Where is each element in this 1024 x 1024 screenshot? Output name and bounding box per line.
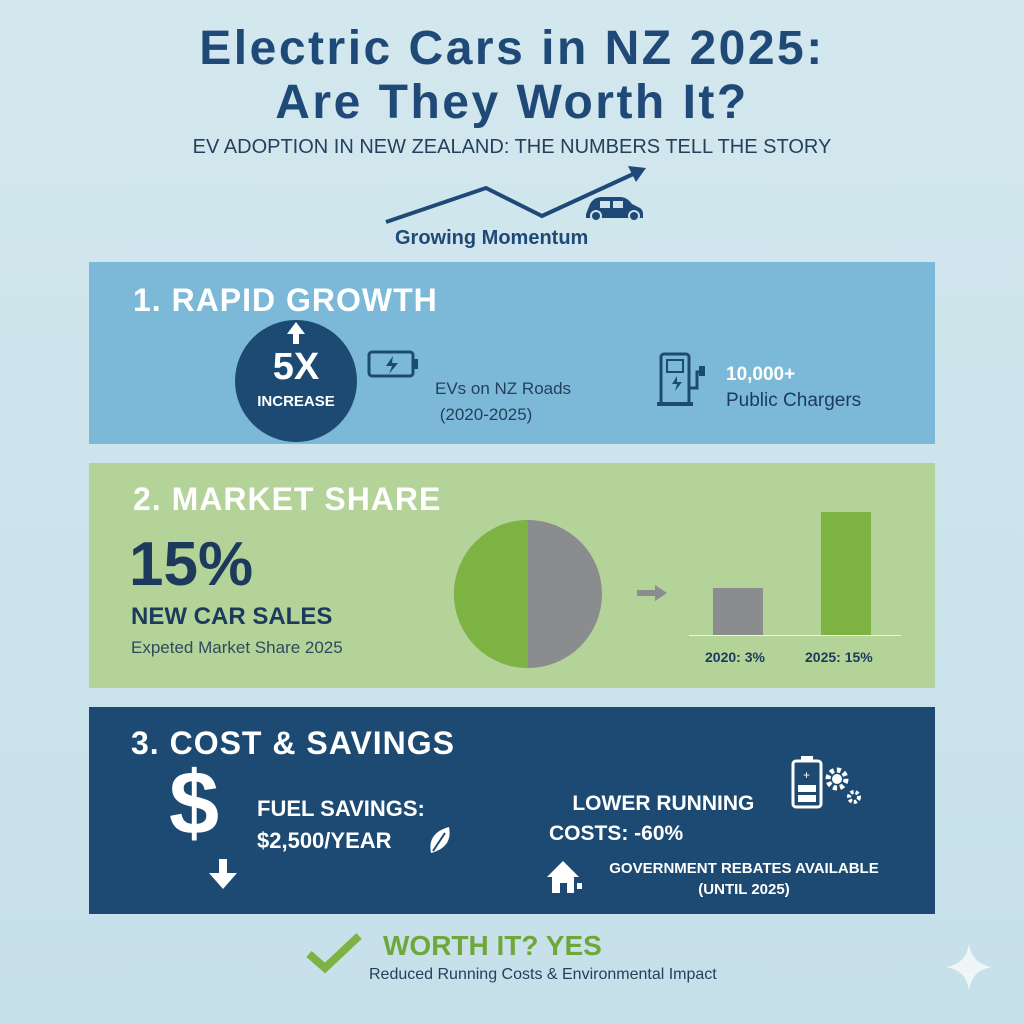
lower running costs text: LOWER RUNNING <box>572 792 754 815</box>
panel: market share <box>89 463 935 688</box>
rebates text: GOVERNMENT REBATES AVAILABLE <box>609 860 879 877</box>
circle 5x <box>235 320 357 442</box>
label new car sales: NEW CAR SALES <box>131 603 332 630</box>
caption: Reduced Running Costs & Environmental Impact <box>369 966 717 983</box>
text: chargers <box>726 364 861 411</box>
rebates text: (UNTIL 2025) <box>698 881 790 898</box>
pie chart <box>454 520 602 668</box>
conclusion: worth it <box>306 930 717 983</box>
fuel savings text: $2,500/YEAR <box>257 828 392 853</box>
text: EVs on roads: EVs on NZ Roads <box>435 379 571 398</box>
circle 5x: INCREASE <box>257 393 335 410</box>
icon: battery <box>368 350 418 378</box>
panel: cost & savings <box>89 707 935 914</box>
text: chargers: Public Chargers <box>726 390 861 411</box>
caption: Expeted Market Share 2025 <box>131 638 343 657</box>
icon: checkmark <box>306 933 362 974</box>
lower running costs text <box>549 792 754 845</box>
icon: charger <box>657 352 705 406</box>
growth chart with car <box>385 166 646 224</box>
arrow <box>637 585 667 601</box>
fuel savings text <box>257 796 425 853</box>
icon: house with plug <box>547 861 582 893</box>
title <box>199 22 825 129</box>
text: EVs on roads <box>435 379 571 424</box>
subtitle: EV ADOPTION IN NEW ZEALAND: THE NUMBERS TELL THE STORY <box>193 136 831 158</box>
icon: leaf <box>430 827 450 853</box>
heading: 3. COST & SAVINGS <box>131 725 455 761</box>
heading: 2. MARKET SHARE <box>133 481 441 517</box>
stat 15%: 15% <box>129 530 253 599</box>
panel: rapid growth <box>89 262 935 444</box>
icon: battery & gears <box>792 756 861 808</box>
lower running costs text: COSTS: -60% <box>549 822 683 845</box>
label: growing momentum: Growing Momentum <box>395 227 588 249</box>
bar chart <box>689 512 901 665</box>
bar chart: 2020: 3% <box>705 649 765 665</box>
bar chart: 2025: 15% <box>805 649 873 665</box>
title: Electric Cars in NZ 2025: <box>199 22 825 75</box>
decorative sparkle <box>946 944 992 990</box>
circle 5x: 5X <box>273 346 319 388</box>
fuel savings text: FUEL SAVINGS: <box>257 796 425 821</box>
text: chargers: 10,000+ <box>726 364 795 385</box>
icon: battery & gears: + <box>803 768 810 782</box>
icon: dollar with down arrow: $ <box>169 754 219 854</box>
arrow up <box>287 322 305 334</box>
heading: 1. RAPID GROWTH <box>133 282 438 318</box>
rebates text <box>609 860 879 898</box>
heading worth it: WORTH IT? YES <box>383 930 602 961</box>
title: Are They Worth It? <box>275 76 749 129</box>
text: EVs on roads: (2020-2025) <box>440 405 532 424</box>
